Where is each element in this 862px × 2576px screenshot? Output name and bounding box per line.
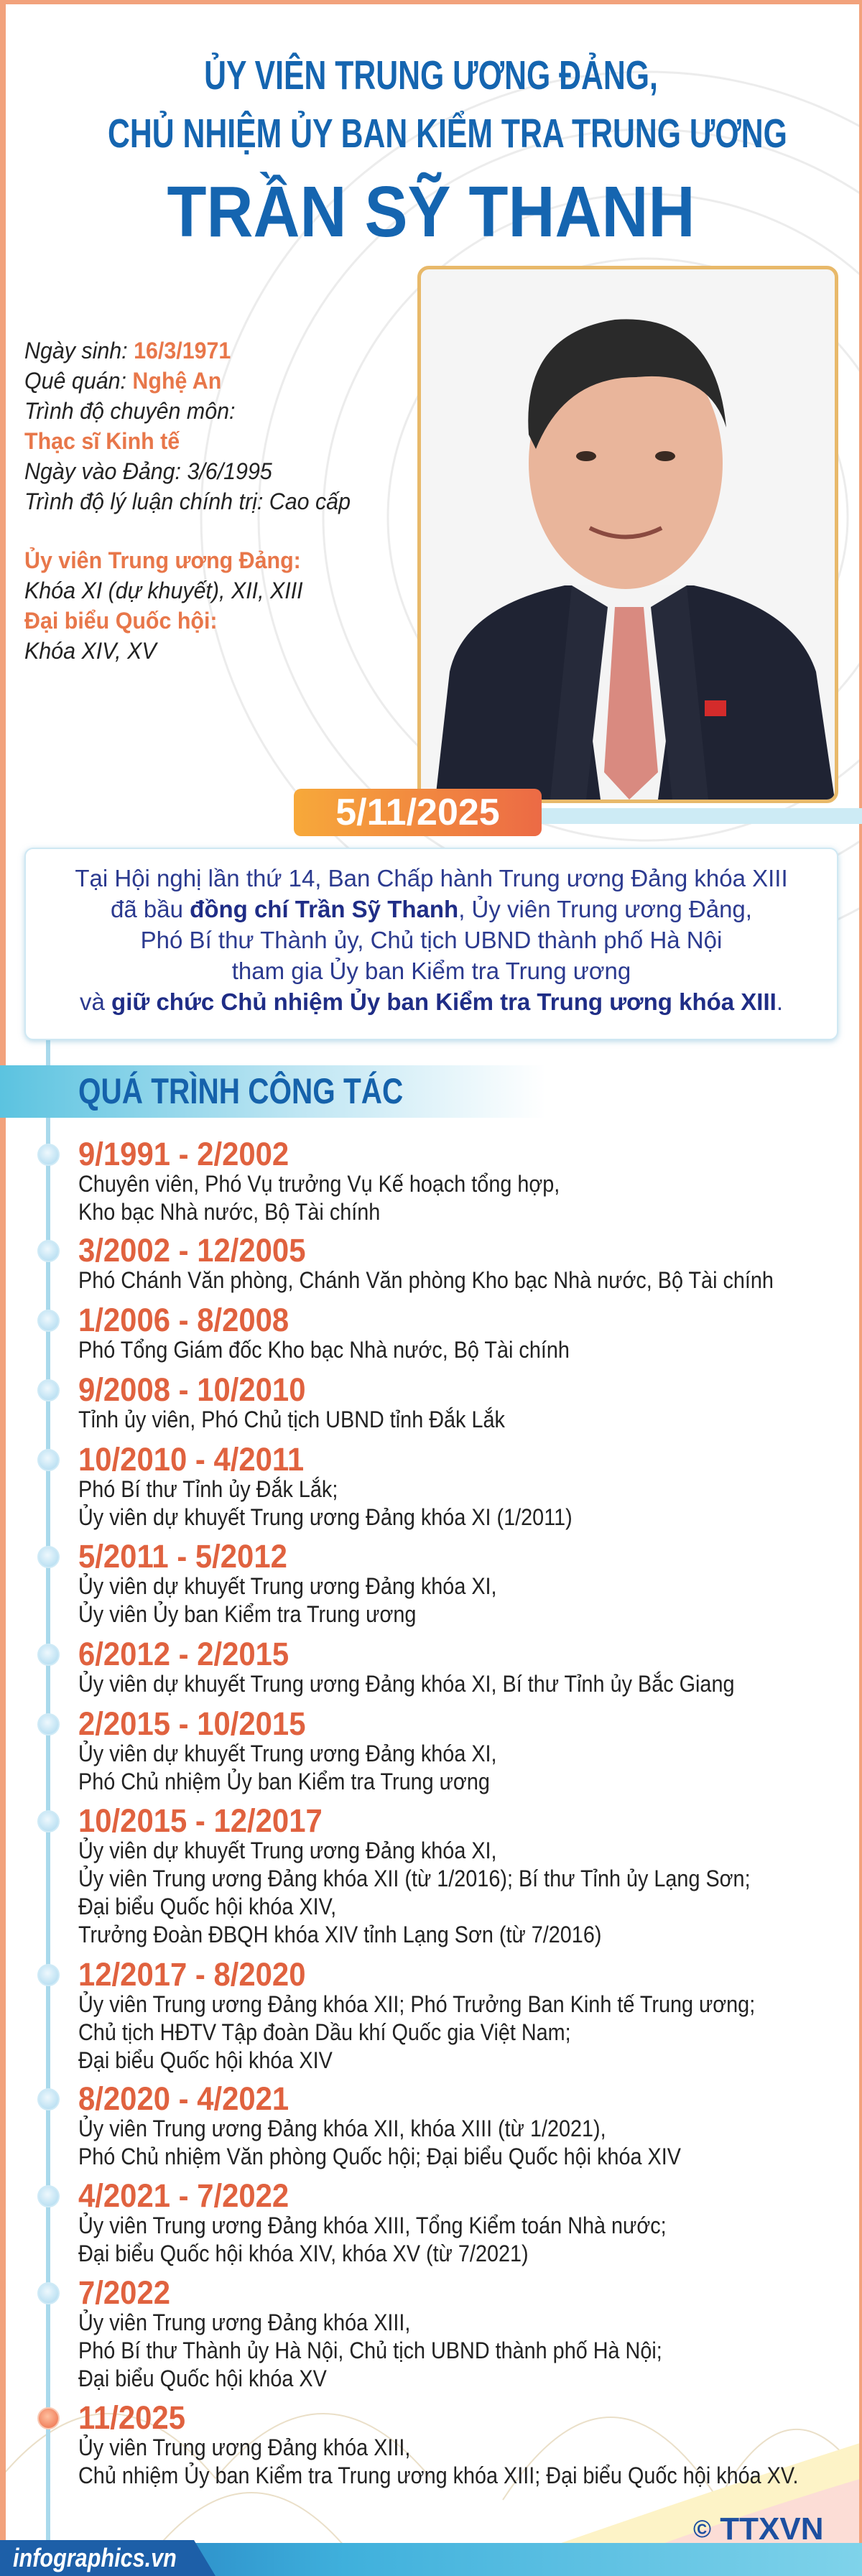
date badge	[294, 789, 542, 836]
entry 1: Kho bạc Nhà nước, Bộ Tài chính	[78, 1199, 380, 1225]
entry 5	[78, 1441, 573, 1530]
title	[108, 52, 787, 252]
entry 8: Ủy viên dự khuyết Trung ương Đảng khóa XI,	[78, 1741, 497, 1766]
personal info: Đại biểu Quốc hội:	[24, 608, 218, 634]
entry 7: 6/2012 - 2/2015	[78, 1636, 289, 1672]
personal info: Ủy viên Trung ương Đảng:	[24, 547, 301, 573]
entry 14: Chủ nhiệm Ủy ban Kiểm tra Trung ương khóa XIII; Đại biểu Quốc hội khóa XV.	[78, 2463, 798, 2488]
entry 4	[78, 1371, 505, 1432]
entry 13: Ủy viên Trung ương Đảng khóa XIII,	[78, 2309, 410, 2335]
entry 9: Đại biểu Quốc hội khóa XIV,	[78, 1894, 336, 1919]
personal info: Trình độ chuyên môn:	[24, 398, 235, 424]
section header: QUÁ TRÌNH CÔNG TÁC	[78, 1071, 403, 1111]
personal info: Trình độ lý luận chính trị: Cao cấp	[24, 488, 351, 514]
timeline dots	[37, 1144, 60, 2429]
footer site label: infographics.vn	[13, 2543, 177, 2572]
entry 7: Ủy viên dự khuyết Trung ương Đảng khóa XI, Bí thư Tỉnh ủy Bắc Giang	[78, 1671, 734, 1697]
lotus background bottom	[6, 2413, 859, 2543]
personal info	[24, 338, 351, 664]
entry 5: Ủy viên dự khuyết Trung ương Đảng khóa XI (1/2011)	[78, 1504, 573, 1530]
entry 5: 10/2010 - 4/2011	[78, 1441, 304, 1478]
callout box: Tại Hội nghị lần thứ 14, Ban Chấp hành Trung ương Đảng khóa XIII	[75, 865, 788, 891]
entry 3: Phó Tổng Giám đốc Kho bạc Nhà nước, Bộ Tài chính	[78, 1337, 570, 1363]
logo TTXVN: © TTXVN	[693, 2511, 824, 2547]
entry 2	[78, 1232, 774, 1293]
entry 1	[78, 1136, 560, 1225]
icon: portrait	[435, 319, 835, 800]
entry 3	[78, 1302, 570, 1363]
footer band	[0, 2543, 862, 2576]
entry 12: Ủy viên Trung ương Đảng khóa XIII, Tổng Kiểm toán Nhà nước;	[78, 2213, 667, 2238]
footer site label	[0, 2540, 216, 2576]
entry 2: Phó Chánh Văn phòng, Chánh Văn phòng Kho bạc Nhà nước, Bộ Tài chính	[78, 1267, 774, 1293]
callout box: tham gia Ủy ban Kiểm tra Trung ương	[232, 958, 631, 984]
entry 2: 3/2002 - 12/2005	[78, 1232, 305, 1269]
light blue strip	[542, 808, 862, 824]
entry 9: Ủy viên dự khuyết Trung ương Đảng khóa XI,	[78, 1838, 497, 1863]
entry 9	[78, 1802, 751, 1947]
timeline line	[46, 1040, 50, 2576]
entry 11: Ủy viên Trung ương Đảng khóa XII, khóa XIII (từ 1/2021),	[78, 2116, 606, 2141]
entry 13: 7/2022	[78, 2274, 170, 2311]
entry 8	[78, 1705, 497, 1794]
personal info: Khóa XIV, XV	[24, 638, 157, 664]
callout box: và giữ chức Chủ nhiệm Ủy ban Kiểm tra Trung ương khóa XIII.	[80, 988, 783, 1015]
callout box	[24, 848, 838, 1040]
entry 10: Ủy viên Trung ương Đảng khóa XII; Phó Trưởng Ban Kinh tế Trung ương;	[78, 1991, 755, 2017]
entry 10: 12/2017 - 8/2020	[78, 1956, 305, 1993]
section header	[0, 1065, 546, 1118]
entry 10: Đại biểu Quốc hội khóa XIV	[78, 2047, 333, 2073]
personal info: Ngày sinh: 16/3/1971	[24, 338, 231, 363]
date badge: 5/11/2025	[335, 792, 500, 833]
entry 3: 1/2006 - 8/2008	[78, 1302, 289, 1338]
entry 13	[78, 2274, 662, 2391]
entry 9: Ủy viên Trung ương Đảng khóa XII (từ 1/2016); Bí thư Tỉnh ủy Lạng Sơn;	[78, 1866, 751, 1891]
entry 13: Đại biểu Quốc hội khóa XV	[78, 2366, 327, 2391]
entry 14: Ủy viên Trung ương Đảng khóa XIII,	[78, 2434, 410, 2460]
entry 11	[78, 2080, 681, 2169]
entry 8: 2/2015 - 10/2015	[78, 1705, 305, 1742]
personal info: Thạc sĩ Kinh tế	[24, 428, 180, 454]
entry 7	[78, 1636, 734, 1697]
entry 4: Tỉnh ủy viên, Phó Chủ tịch UBND tỉnh Đắk Lắk	[78, 1407, 505, 1432]
entry 6: 5/2011 - 5/2012	[78, 1538, 287, 1575]
callout box: đã bầu đồng chí Trần Sỹ Thanh, Ủy viên Trung ương Đảng,	[111, 896, 752, 922]
entry 5: Phó Bí thư Tỉnh ủy Đắk Lắk;	[78, 1476, 338, 1502]
personal info: Quê quán: Nghệ An	[24, 368, 221, 394]
entry 11: Phó Chủ nhiệm Văn phòng Quốc hội; Đại biểu Quốc hội khóa XIV	[78, 2144, 681, 2169]
entry 1: 9/1991 - 2/2002	[78, 1136, 289, 1172]
entry 6	[78, 1538, 497, 1627]
entry 6: Ủy viên dự khuyết Trung ương Đảng khóa XI,	[78, 1573, 497, 1599]
entry 12	[78, 2177, 667, 2266]
entry 14	[78, 2399, 798, 2488]
entry 1: Chuyên viên, Phó Vụ trưởng Vụ Kế hoạch tổng hợp,	[78, 1171, 560, 1197]
entry 8: Phó Chủ nhiệm Ủy ban Kiểm tra Trung ương	[78, 1769, 490, 1794]
title: TRẦN SỸ THANH	[167, 172, 695, 252]
entry 12: 4/2021 - 7/2022	[78, 2177, 289, 2214]
entry 13: Phó Bí thư Thành ủy Hà Nội, Chủ tịch UBND thành phố Hà Nội;	[78, 2338, 662, 2363]
title: CHỦ NHIỆM ỦY BAN KIỂM TRA TRUNG ƯƠNG	[108, 111, 787, 157]
entry 4: 9/2008 - 10/2010	[78, 1371, 305, 1408]
entry 10	[78, 1956, 755, 2073]
entry 6: Ủy viên Ủy ban Kiểm tra Trung ương	[78, 1601, 416, 1627]
personal info: Khóa XI (dự khuyết), XII, XIII	[24, 578, 303, 603]
entry 14: 11/2025	[78, 2399, 185, 2436]
entry 9: 10/2015 - 12/2017	[78, 1802, 323, 1839]
entry 10: Chủ tịch HĐTV Tập đoàn Dầu khí Quốc gia Việt Nam;	[78, 2019, 571, 2045]
title: ỦY VIÊN TRUNG ƯƠNG ĐẢNG,	[204, 52, 658, 98]
photo frame with portrait	[417, 266, 838, 803]
background drum pattern	[200, 70, 859, 920]
entry 11: 8/2020 - 4/2021	[78, 2080, 289, 2117]
callout box: Phó Bí thư Thành ủy, Chủ tịch UBND thành phố Hà Nội	[141, 927, 722, 953]
entry 12: Đại biểu Quốc hội khóa XIV, khóa XV (từ 7/2021)	[78, 2241, 529, 2266]
entry 9: Trưởng Đoàn ĐBQH khóa XIV tỉnh Lạng Sơn (từ 7/2016)	[78, 1922, 601, 1947]
personal info: Ngày vào Đảng: 3/6/1995	[24, 458, 272, 484]
